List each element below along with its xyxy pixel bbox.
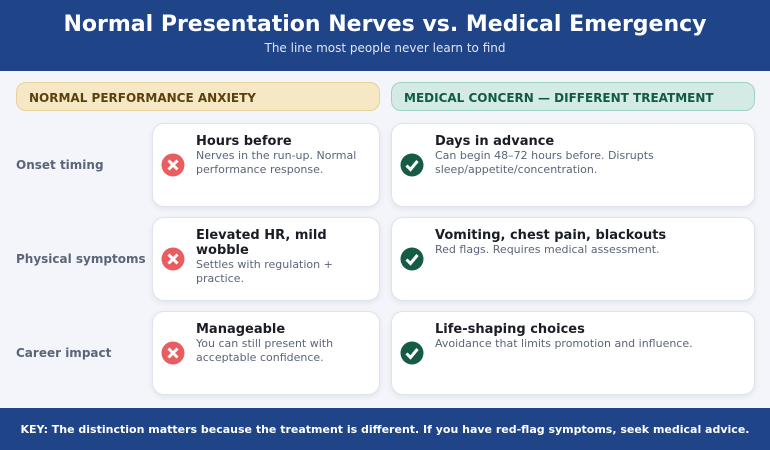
- text: [196, 228, 333, 284]
- row label: onset: Onset timing: [16, 158, 104, 172]
- title: Normal Presentation Nerves vs. Medical Emergency: [63, 12, 707, 37]
- text: You can still present with acceptable confidence.: [196, 337, 333, 364]
- text: Settles with regulation + practice.: [196, 258, 333, 284]
- icon: green check: [400, 248, 424, 270]
- card: days in advance: [391, 123, 755, 207]
- text: Vomiting, chest pain, blackouts: [435, 228, 666, 243]
- text: [196, 322, 333, 364]
- card: vomiting: [391, 217, 755, 301]
- row label: physical: Physical symptoms: [16, 252, 146, 266]
- footer key: [0, 408, 770, 450]
- icon: red x: [162, 342, 184, 364]
- card: hours before: [152, 123, 380, 207]
- text: [435, 134, 654, 176]
- column header: normal: NORMAL PERFORMANCE ANXIETY: [29, 91, 256, 105]
- icon: green check: [400, 154, 424, 176]
- card: life-shaping: [391, 311, 755, 395]
- text: Days in advance: [435, 134, 554, 149]
- text: Manageable: [196, 322, 285, 337]
- text: Red flags. Requires medical assessment.: [435, 243, 660, 256]
- icon: green check: [400, 342, 424, 364]
- text: Nerves in the run-up. Normal performance response.: [196, 149, 356, 176]
- text: Can begin 48–72 hours before. Disrupts sleep/appetite/concentration.: [435, 149, 654, 176]
- text: Hours before: [196, 134, 292, 149]
- card: manageable: [152, 311, 380, 395]
- text: Elevated HR, mild wobble: [196, 228, 327, 258]
- card: elevated HR: [152, 217, 380, 301]
- column header: normal: [16, 82, 380, 111]
- text: Life-shaping choices: [435, 322, 585, 337]
- icon: red x: [162, 248, 184, 270]
- icon: red x: [162, 154, 184, 176]
- subtitle: The line most people never learn to find: [264, 41, 505, 55]
- text: Avoidance that limits promotion and influence.: [435, 337, 693, 350]
- text: [435, 228, 666, 256]
- row label: career: Career impact: [16, 346, 111, 360]
- text: [196, 134, 356, 176]
- header: [0, 0, 770, 71]
- footer key: KEY: The distinction matters because the treatment is different. If you have red-flag symptoms, seek medical advice.: [21, 423, 749, 436]
- column header: medical: MEDICAL CONCERN — DIFFERENT TREATMENT: [404, 91, 714, 105]
- text: [435, 322, 693, 350]
- column header: medical: [391, 82, 755, 111]
